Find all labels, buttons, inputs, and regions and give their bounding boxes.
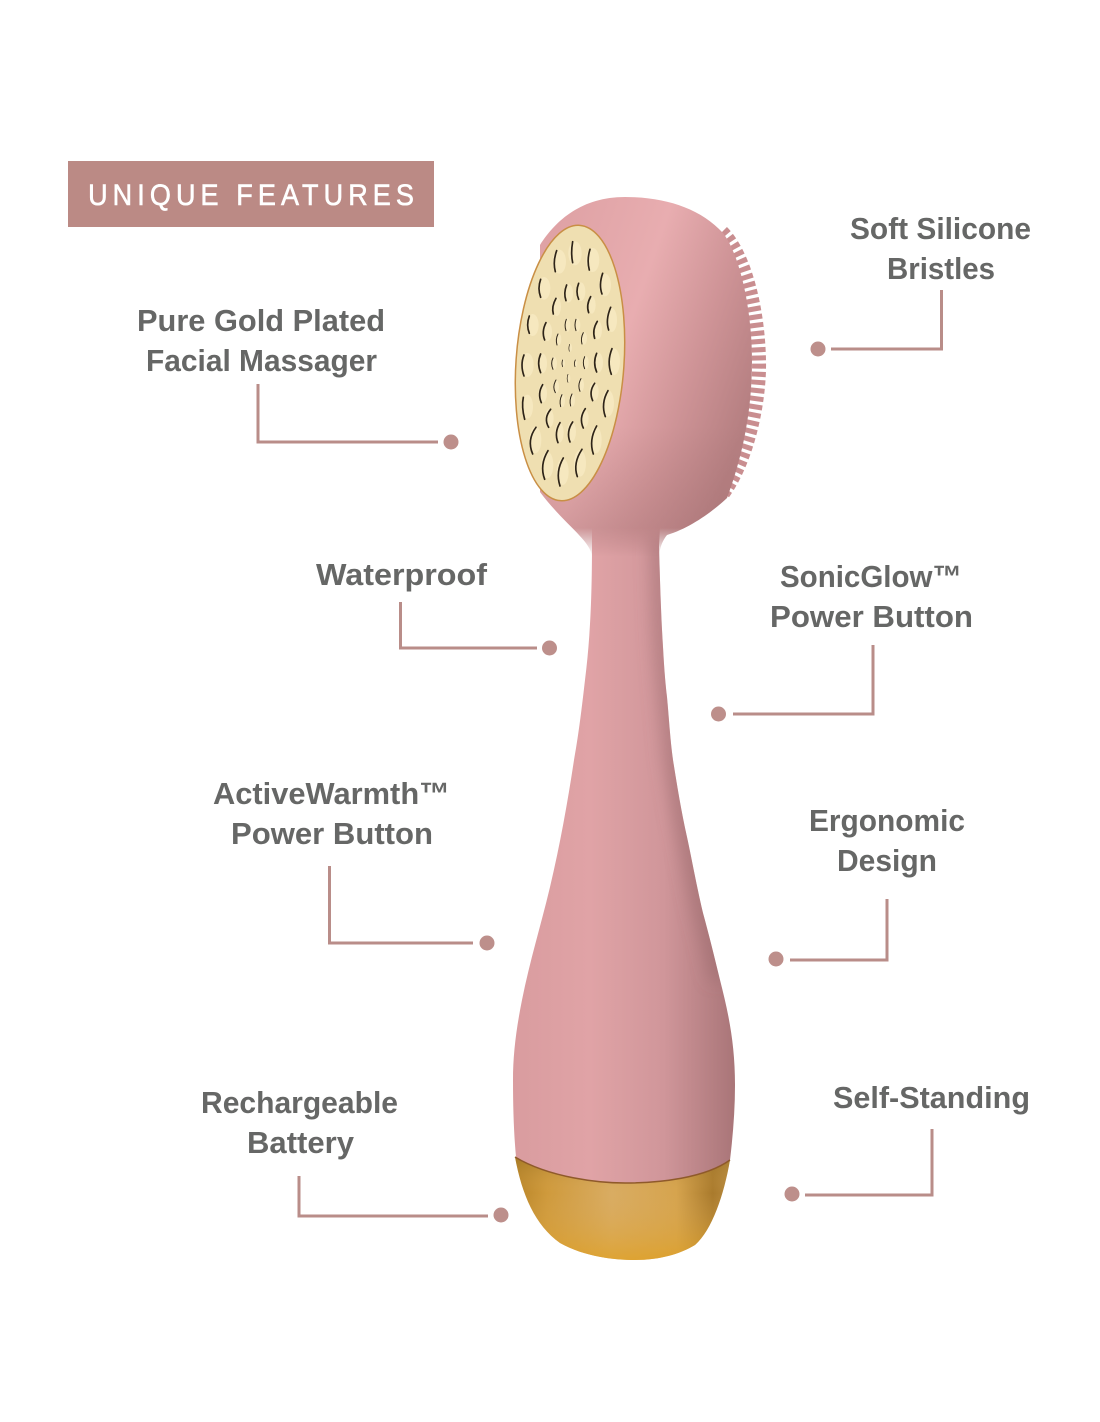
- label: rechargeable battery: Rechargeable: [201, 1085, 398, 1120]
- label: sonicglow power button: Power Button: [770, 599, 973, 634]
- label: self-standing: [784, 1080, 1030, 1202]
- label: soft silicone bristles: [810, 211, 1031, 356]
- label: soft silicone bristles: Bristles: [887, 251, 995, 286]
- label: pure gold plated facial massager: Facial Massager: [146, 343, 377, 378]
- label: waterproof: [316, 557, 557, 656]
- gold base: [515, 1157, 730, 1260]
- label: rechargeable battery: [201, 1085, 508, 1222]
- label: ergonomic design: [768, 803, 965, 966]
- label: activewarmth power button: [213, 776, 494, 950]
- banner: unique features: [68, 161, 434, 227]
- label: sonicglow power button: [711, 559, 973, 722]
- label: activewarmth power button: Power Button: [231, 816, 433, 851]
- bristles: [722, 232, 759, 495]
- label: self-standing: Self-Standing: [833, 1080, 1030, 1115]
- device handle: [513, 525, 735, 1183]
- label: ergonomic design: Ergonomic: [809, 803, 965, 838]
- label: soft silicone bristles: Soft Silicone: [850, 211, 1031, 246]
- device head: [540, 197, 752, 556]
- label: rechargeable battery: Battery: [247, 1125, 355, 1160]
- gold massager plate: [507, 222, 633, 504]
- banner: unique features: UNIQUE FEATURES: [88, 179, 414, 212]
- label: pure gold plated facial massager: Pure Gold Plated: [137, 303, 385, 338]
- label: ergonomic design: Design: [837, 843, 937, 878]
- product: facial cleansing device: [507, 197, 759, 1260]
- label: pure gold plated facial massager: [137, 303, 458, 450]
- label: waterproof: Waterproof: [316, 557, 488, 592]
- label: activewarmth power button: ActiveWarmth™: [213, 776, 450, 811]
- label: sonicglow power button: SonicGlow™: [780, 559, 962, 594]
